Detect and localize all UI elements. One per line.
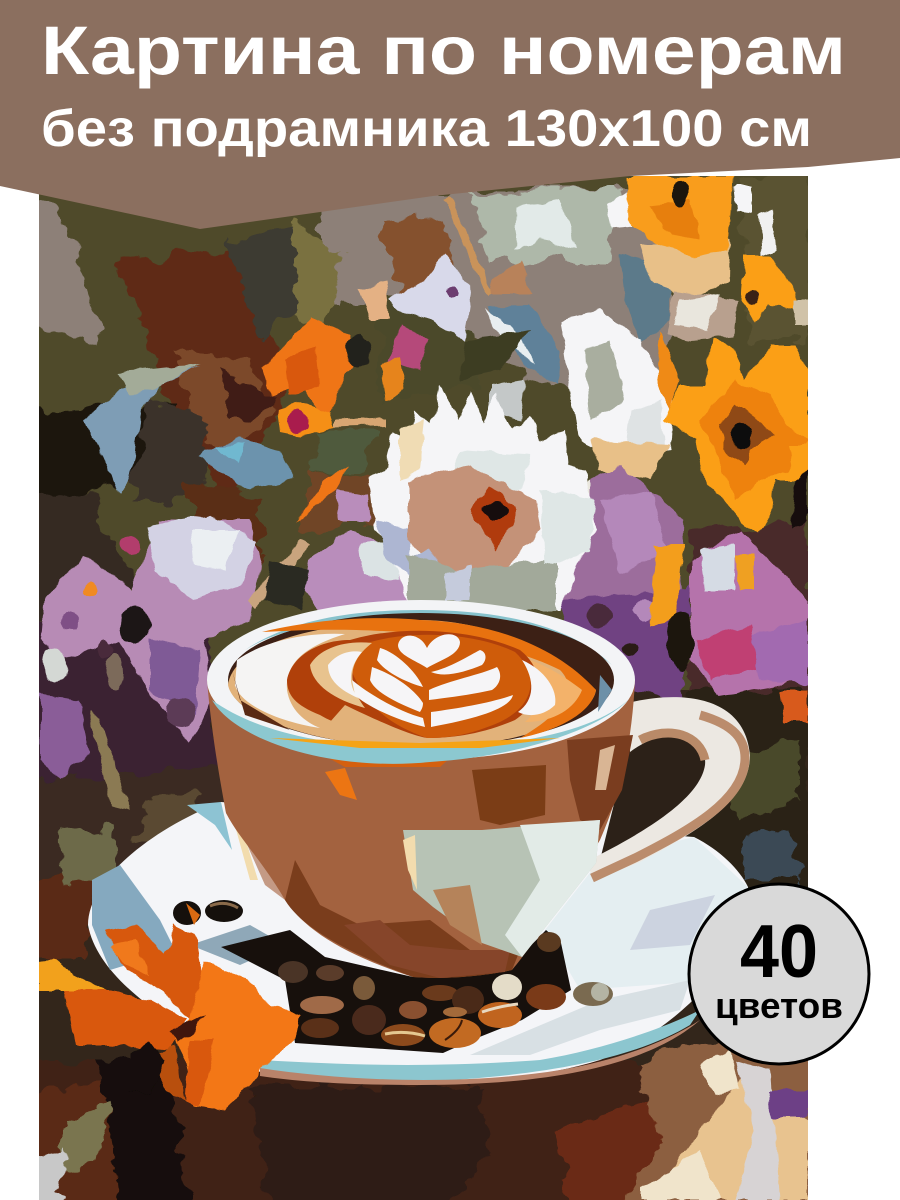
header banner [0, 0, 900, 229]
painting: large white flower [369, 385, 596, 610]
painting: purple flowers [40, 465, 808, 810]
painting: table [39, 1042, 808, 1200]
badge label: цветов [715, 985, 843, 1026]
painting: blue leaves [83, 255, 672, 523]
subtitle: без подрамника 130х100 см [41, 100, 812, 158]
painting: coffee cup and flowers [30, 176, 830, 1200]
painting: coffee beans [173, 900, 613, 1053]
painting: cup handle [585, 697, 750, 880]
painting: orange flowers top right [605, 176, 808, 340]
painting: orange flower left [262, 316, 385, 436]
painting: right orange flower [655, 330, 808, 533]
title: Картина по номерам [41, 12, 846, 89]
badge number: 40 [740, 909, 818, 993]
painting: saucer [88, 780, 748, 1085]
latte art rosetta [352, 634, 513, 727]
painting: small upper flowers [360, 198, 674, 480]
painting: cup rim and latte [207, 600, 635, 764]
painting: table reflections [640, 1050, 808, 1200]
painting background foliage [30, 176, 810, 960]
painting: orange flower bottom left [39, 925, 300, 1110]
badge: 40 colours [689, 884, 869, 1064]
painting: cup body [207, 680, 635, 978]
